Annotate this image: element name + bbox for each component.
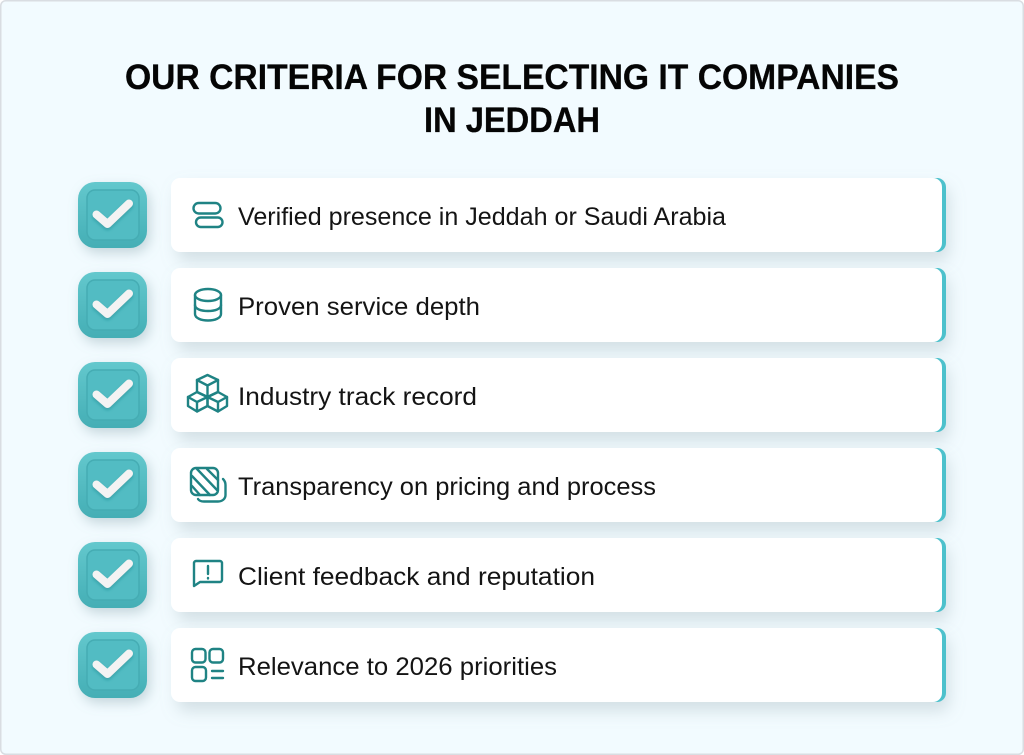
card 6 (171, 628, 946, 702)
label 6: Relevance to 2026 priorities (238, 653, 557, 681)
row 6: relevance (78, 628, 946, 702)
icon: overlapping hatched squares (191, 468, 226, 502)
label 4: Transparency on pricing and process (238, 473, 656, 501)
row 4: transparency (78, 448, 946, 522)
icon: grid with lines (192, 649, 223, 681)
icon: speech bubble with exclamation (194, 561, 222, 586)
icon: database (195, 289, 221, 320)
card 2 (171, 268, 946, 342)
label 5: Client feedback and reputation (238, 563, 595, 591)
checkbox icon 3 (78, 362, 147, 428)
checkbox icon 5 (78, 542, 147, 608)
row 1: verified presence (78, 178, 946, 252)
label 3: Industry track record (238, 383, 477, 411)
icon: stacked pills (194, 203, 222, 227)
checkbox icon 2 (78, 272, 147, 338)
row 5: client feedback (78, 538, 946, 612)
label 1: Verified presence in Jeddah or Saudi Arabia (238, 203, 726, 231)
card 5 (171, 538, 946, 612)
label 2: Proven service depth (238, 293, 480, 321)
card 3 (171, 358, 946, 432)
icon: cubes (188, 375, 227, 412)
checkbox icon 1 (78, 182, 147, 248)
title: IN JEDDAH (424, 101, 600, 140)
row 2: service depth (78, 268, 946, 342)
row 3: industry track record (78, 358, 946, 432)
title (125, 58, 899, 140)
card 1 (171, 178, 946, 252)
checkbox icon 6 (78, 632, 147, 698)
card 4 (171, 448, 946, 522)
checkbox icon 4 (78, 452, 147, 518)
title: OUR CRITERIA FOR SELECTING IT COMPANIES (125, 58, 899, 97)
